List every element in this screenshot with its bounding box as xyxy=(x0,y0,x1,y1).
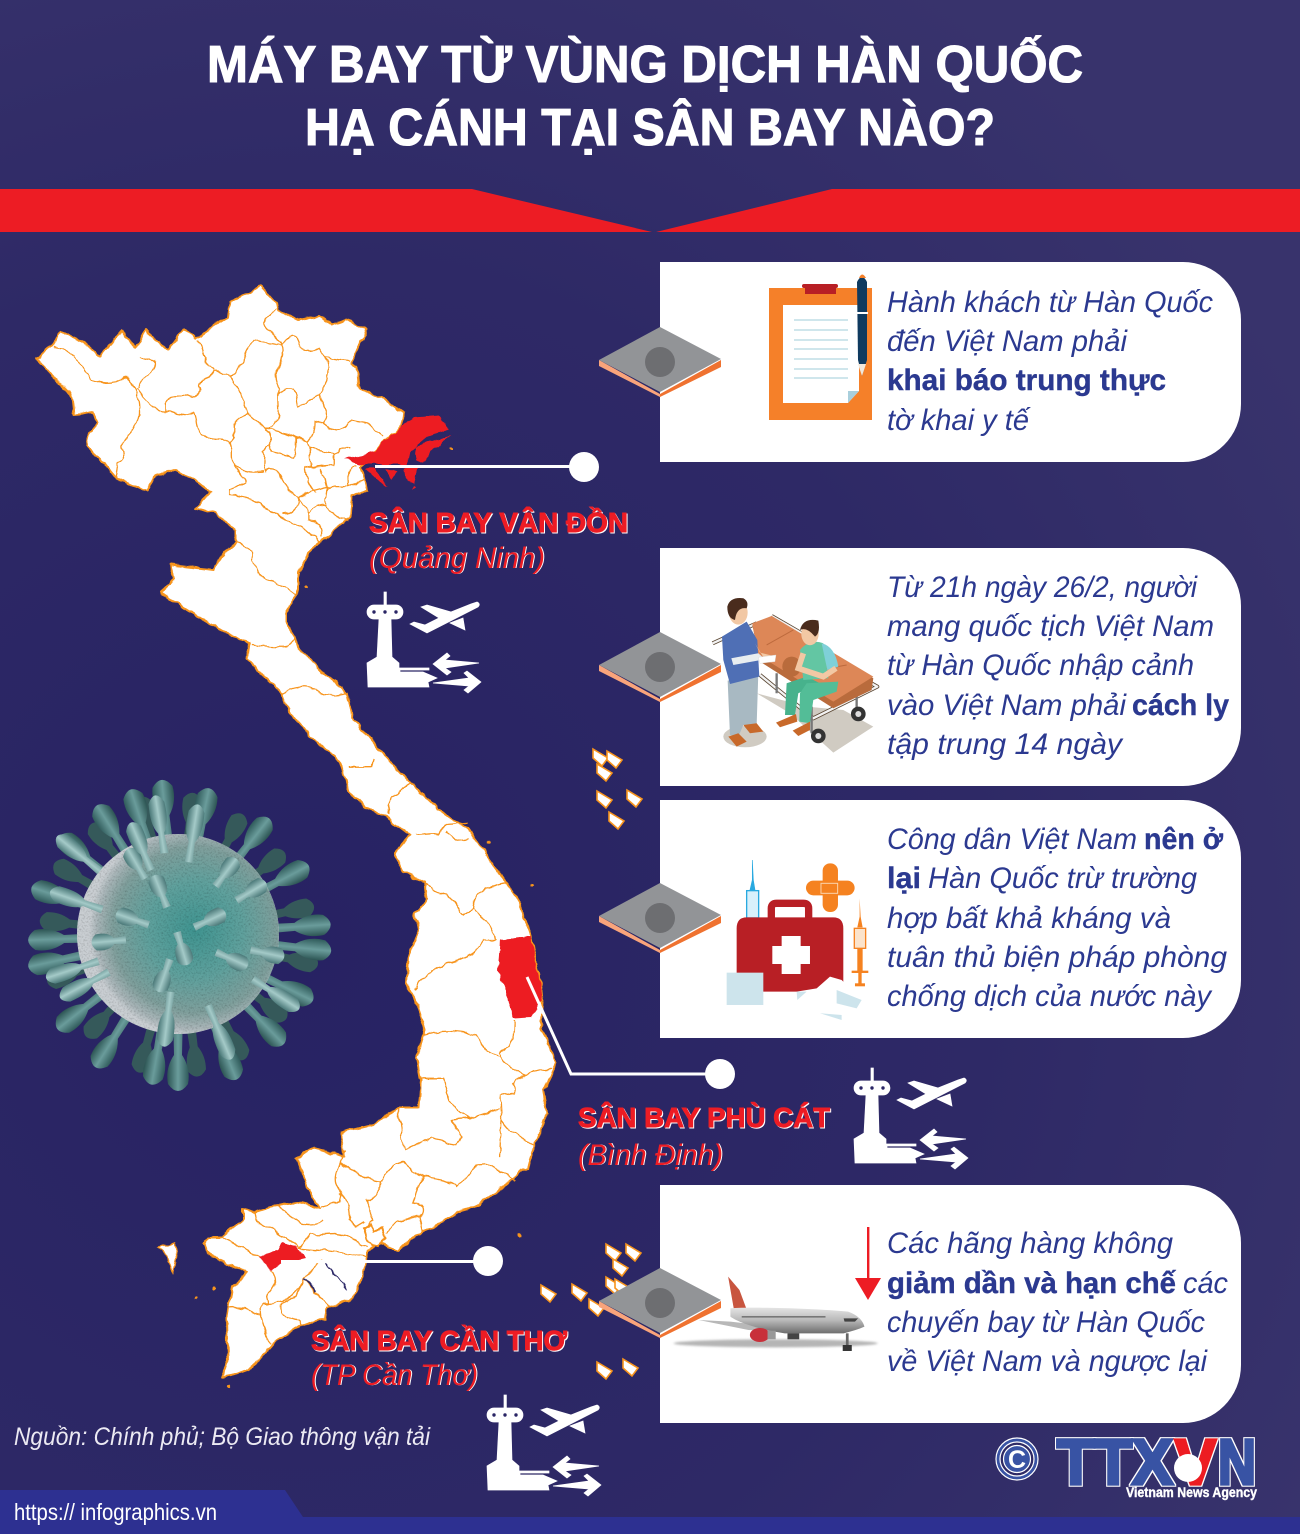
logo: copyright and TTXVN: Vietnam News Agency xyxy=(1126,1484,1257,1500)
source note: Nguồn: Chính phủ; Bộ Giao thông vận tải xyxy=(14,1423,431,1451)
panel: medical declaration xyxy=(660,262,1241,462)
text: Các hãng hàng không xyxy=(887,1227,1173,1260)
callout line: Can Tho xyxy=(281,1246,503,1276)
red banner with notch xyxy=(0,189,1300,232)
icon: airplane xyxy=(674,1277,878,1351)
panel: airlines reduce flights: chuyến bay từ Hàn Quốc xyxy=(887,1306,1205,1339)
confetti diamonds xyxy=(541,749,642,1379)
mattress xyxy=(752,616,873,708)
panel: quarantine: cách ly xyxy=(1132,689,1229,722)
label: Phu Cat airport: (Bình Định) xyxy=(578,1139,723,1172)
callout line: Van Don xyxy=(375,452,599,482)
label: Phu Cat airport: SÂN BAY PHÙ CÁT xyxy=(578,1102,830,1133)
province: Quang Ninh xyxy=(344,417,452,490)
province borders south xyxy=(222,1150,517,1343)
map of Vietnam xyxy=(37,286,556,1388)
footer bar xyxy=(0,1490,1300,1534)
panel: medical declaration: đến Việt Nam phải xyxy=(887,325,1128,358)
panel: stay in Korea xyxy=(660,800,1241,1038)
icon: copyright xyxy=(996,1438,1038,1480)
panel: airlines reduce flights: về Việt Nam và ngược lại xyxy=(887,1345,1208,1378)
province borders central xyxy=(350,760,551,1157)
virus surface spikes xyxy=(43,794,304,1063)
text: Hành khách từ Hàn Quốc xyxy=(887,286,1213,319)
icon: doctor and patient on stretcher xyxy=(713,598,877,753)
title: HẠ CÁNH TẠI SÂN BAY NÀO? xyxy=(305,98,995,157)
island: Phu Quoc xyxy=(158,1243,177,1273)
panel: stay in Korea: Hàn Quốc trừ trường xyxy=(928,862,1197,895)
label: Phu Cat airport xyxy=(578,1102,830,1172)
province borders north xyxy=(54,308,384,695)
virus illustration xyxy=(26,779,332,1091)
patient xyxy=(785,677,820,715)
panel: stay in Korea: chống dịch của nước này xyxy=(887,980,1213,1013)
callout line: Phu Cat xyxy=(527,977,735,1089)
label: Can Tho airport xyxy=(311,1325,567,1392)
panel: medical declaration: khai báo trung thực xyxy=(887,364,1166,397)
icon: airport Van Don xyxy=(367,592,481,693)
label: Can Tho airport: (TP Cần Thơ) xyxy=(311,1359,478,1392)
logo: copyright and TTXVN xyxy=(996,1426,1257,1500)
panel: stay in Korea: tuân thủ biện pháp phòng xyxy=(887,941,1227,974)
connector plate 2 xyxy=(599,632,721,702)
label: Can Tho airport: SÂN BAY CẦN THƠ xyxy=(311,1325,567,1356)
panel: airlines reduce flights: giảm dần và hạn chế xyxy=(887,1267,1176,1300)
label: Van Don airport: (Quảng Ninh) xyxy=(369,542,545,575)
icon: airport Phu Cat xyxy=(854,1068,968,1169)
province: Binh Dinh xyxy=(498,937,543,1018)
label: Van Don airport xyxy=(369,507,628,575)
panel: airlines reduce flights xyxy=(660,1185,1241,1423)
panel: quarantine: vào Việt Nam phải xyxy=(887,689,1127,722)
doctor xyxy=(728,673,758,737)
title: MÁY BAY TỪ VÙNG DỊCH HÀN QUỐC xyxy=(207,35,1083,94)
panel: airlines reduce flights: các xyxy=(1183,1267,1228,1300)
logo: copyright and TTXVN: V xyxy=(1175,1426,1216,1498)
panel: quarantine xyxy=(660,548,1241,786)
stretcher frame xyxy=(713,616,877,718)
panel: quarantine: từ Hàn Quốc nhập cảnh xyxy=(887,649,1194,682)
label: Van Don airport: SÂN BAY VÂN ĐỒN xyxy=(369,507,628,538)
title xyxy=(207,35,1083,157)
connector plate 3 xyxy=(599,883,721,953)
footer bar: https:// infographics.vn xyxy=(14,1499,217,1525)
connector plate 4 xyxy=(599,1268,721,1338)
virus body xyxy=(77,834,279,1034)
icon: down arrow xyxy=(855,1227,881,1300)
panel: stay in Korea: nên ở xyxy=(1144,823,1224,856)
panel: quarantine: mang quốc tịch Việt Nam xyxy=(887,610,1214,643)
icon: clipboard xyxy=(769,274,872,420)
islets xyxy=(193,446,534,1388)
logo: copyright and TTXVN: TTX xyxy=(1057,1426,1173,1498)
icon: first aid kit xyxy=(727,860,868,1020)
panel: medical declaration: tờ khai y tế xyxy=(887,404,1031,437)
panel: stay in Korea: lại xyxy=(887,862,921,895)
panel: quarantine: tập trung 14 ngày xyxy=(887,728,1124,761)
panel: stay in Korea: hợp bất khả kháng và xyxy=(887,902,1171,935)
icon: airport Can Tho xyxy=(487,1395,601,1496)
connector plate 1 xyxy=(599,327,721,397)
text: Từ 21h ngày 26/2, người xyxy=(887,571,1198,604)
icon: copyright: C xyxy=(1008,1446,1026,1474)
province: Can Tho xyxy=(258,1243,305,1270)
logo: copyright and TTXVN: N xyxy=(1218,1426,1256,1498)
text: Công dân Việt Nam xyxy=(887,823,1137,856)
